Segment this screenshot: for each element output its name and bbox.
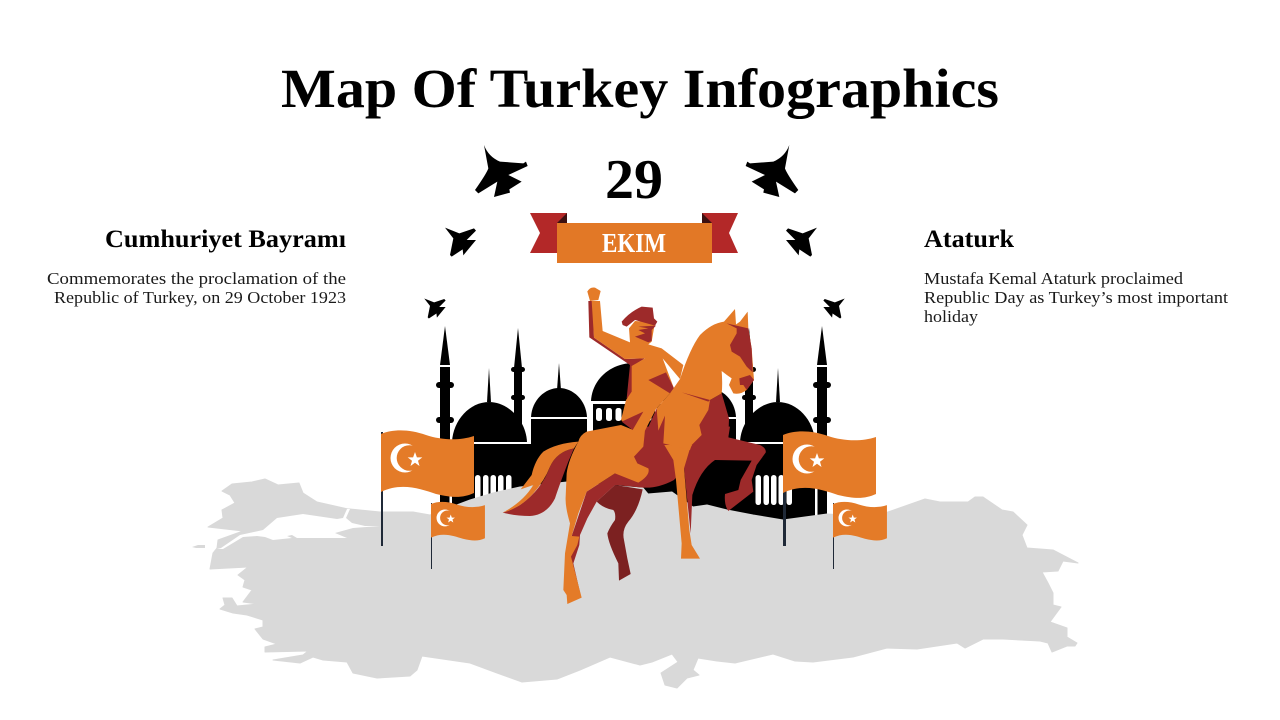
left description: Commemorates the proclamation of the bbox=[47, 269, 346, 288]
icon: medium jet left bbox=[445, 228, 476, 257]
left text block: Cumhuriyet Bayramı bbox=[47, 224, 346, 307]
pole: small left bbox=[431, 503, 432, 569]
right description: Republic Day as Turkey’s most important bbox=[924, 288, 1228, 307]
flag: large left bbox=[381, 430, 474, 497]
map of Turkey bbox=[192, 479, 1078, 688]
tail bbox=[503, 442, 578, 513]
horse lower body bbox=[503, 425, 766, 604]
pole: large right bbox=[783, 490, 786, 546]
fist bbox=[587, 287, 601, 301]
pole: small right bbox=[833, 503, 834, 569]
right description: holiday bbox=[924, 307, 979, 326]
horse upper body and rider bbox=[587, 287, 754, 450]
flag: large right bbox=[783, 431, 876, 498]
icon: large jet right bbox=[746, 145, 798, 197]
supporting foreleg bbox=[663, 428, 703, 559]
icon: medium jet right bbox=[786, 228, 817, 257]
right text block: Ataturk bbox=[924, 224, 1228, 326]
face shadow bbox=[635, 326, 656, 342]
rider body bbox=[592, 301, 683, 431]
left heading: Cumhuriyet Bayramı bbox=[105, 224, 346, 253]
right description bbox=[924, 269, 1228, 326]
horse rear and rider leg bbox=[563, 425, 649, 604]
ribbon: EKIM: EKIM bbox=[602, 228, 666, 258]
cap bbox=[622, 307, 657, 327]
left description bbox=[47, 269, 346, 307]
flag poles bbox=[381, 432, 834, 569]
horse head shadow bbox=[727, 323, 753, 372]
flag: small right bbox=[833, 502, 887, 540]
horse neck, head and chest bbox=[657, 309, 754, 450]
mosque silhouette bbox=[436, 326, 831, 529]
icon: large jet left bbox=[475, 145, 528, 197]
title: Map Of Turkey Infographics bbox=[281, 58, 999, 119]
hind leg shadow bbox=[597, 485, 643, 581]
ribbon: EKIM bbox=[530, 213, 738, 263]
left description: Republic of Turkey, on 29 October 1923 bbox=[54, 288, 346, 307]
Sea of Marmara bbox=[217, 509, 380, 549]
coat shadow bbox=[622, 412, 643, 430]
right description: Mustafa Kemal Ataturk proclaimed bbox=[924, 269, 1184, 288]
icon: small jet right bbox=[823, 298, 845, 318]
icon: small jet left bbox=[424, 298, 446, 318]
tail shadow bbox=[503, 448, 574, 516]
belly and raised foreleg bbox=[571, 427, 766, 597]
jets bbox=[424, 145, 845, 318]
island bbox=[192, 545, 205, 548]
chest shadow bbox=[647, 393, 729, 445]
rider on horse bbox=[503, 287, 766, 604]
chest crease bbox=[682, 392, 710, 402]
arm shadow bbox=[588, 301, 645, 398]
flag: small left bbox=[431, 502, 485, 540]
gap between arm and neck bbox=[667, 370, 680, 388]
pole: large left bbox=[381, 432, 383, 546]
horse muzzle shadow bbox=[739, 375, 754, 390]
right heading: Ataturk bbox=[924, 224, 1015, 253]
torso shadow bbox=[648, 372, 674, 393]
date number 29: 29 bbox=[605, 149, 663, 211]
